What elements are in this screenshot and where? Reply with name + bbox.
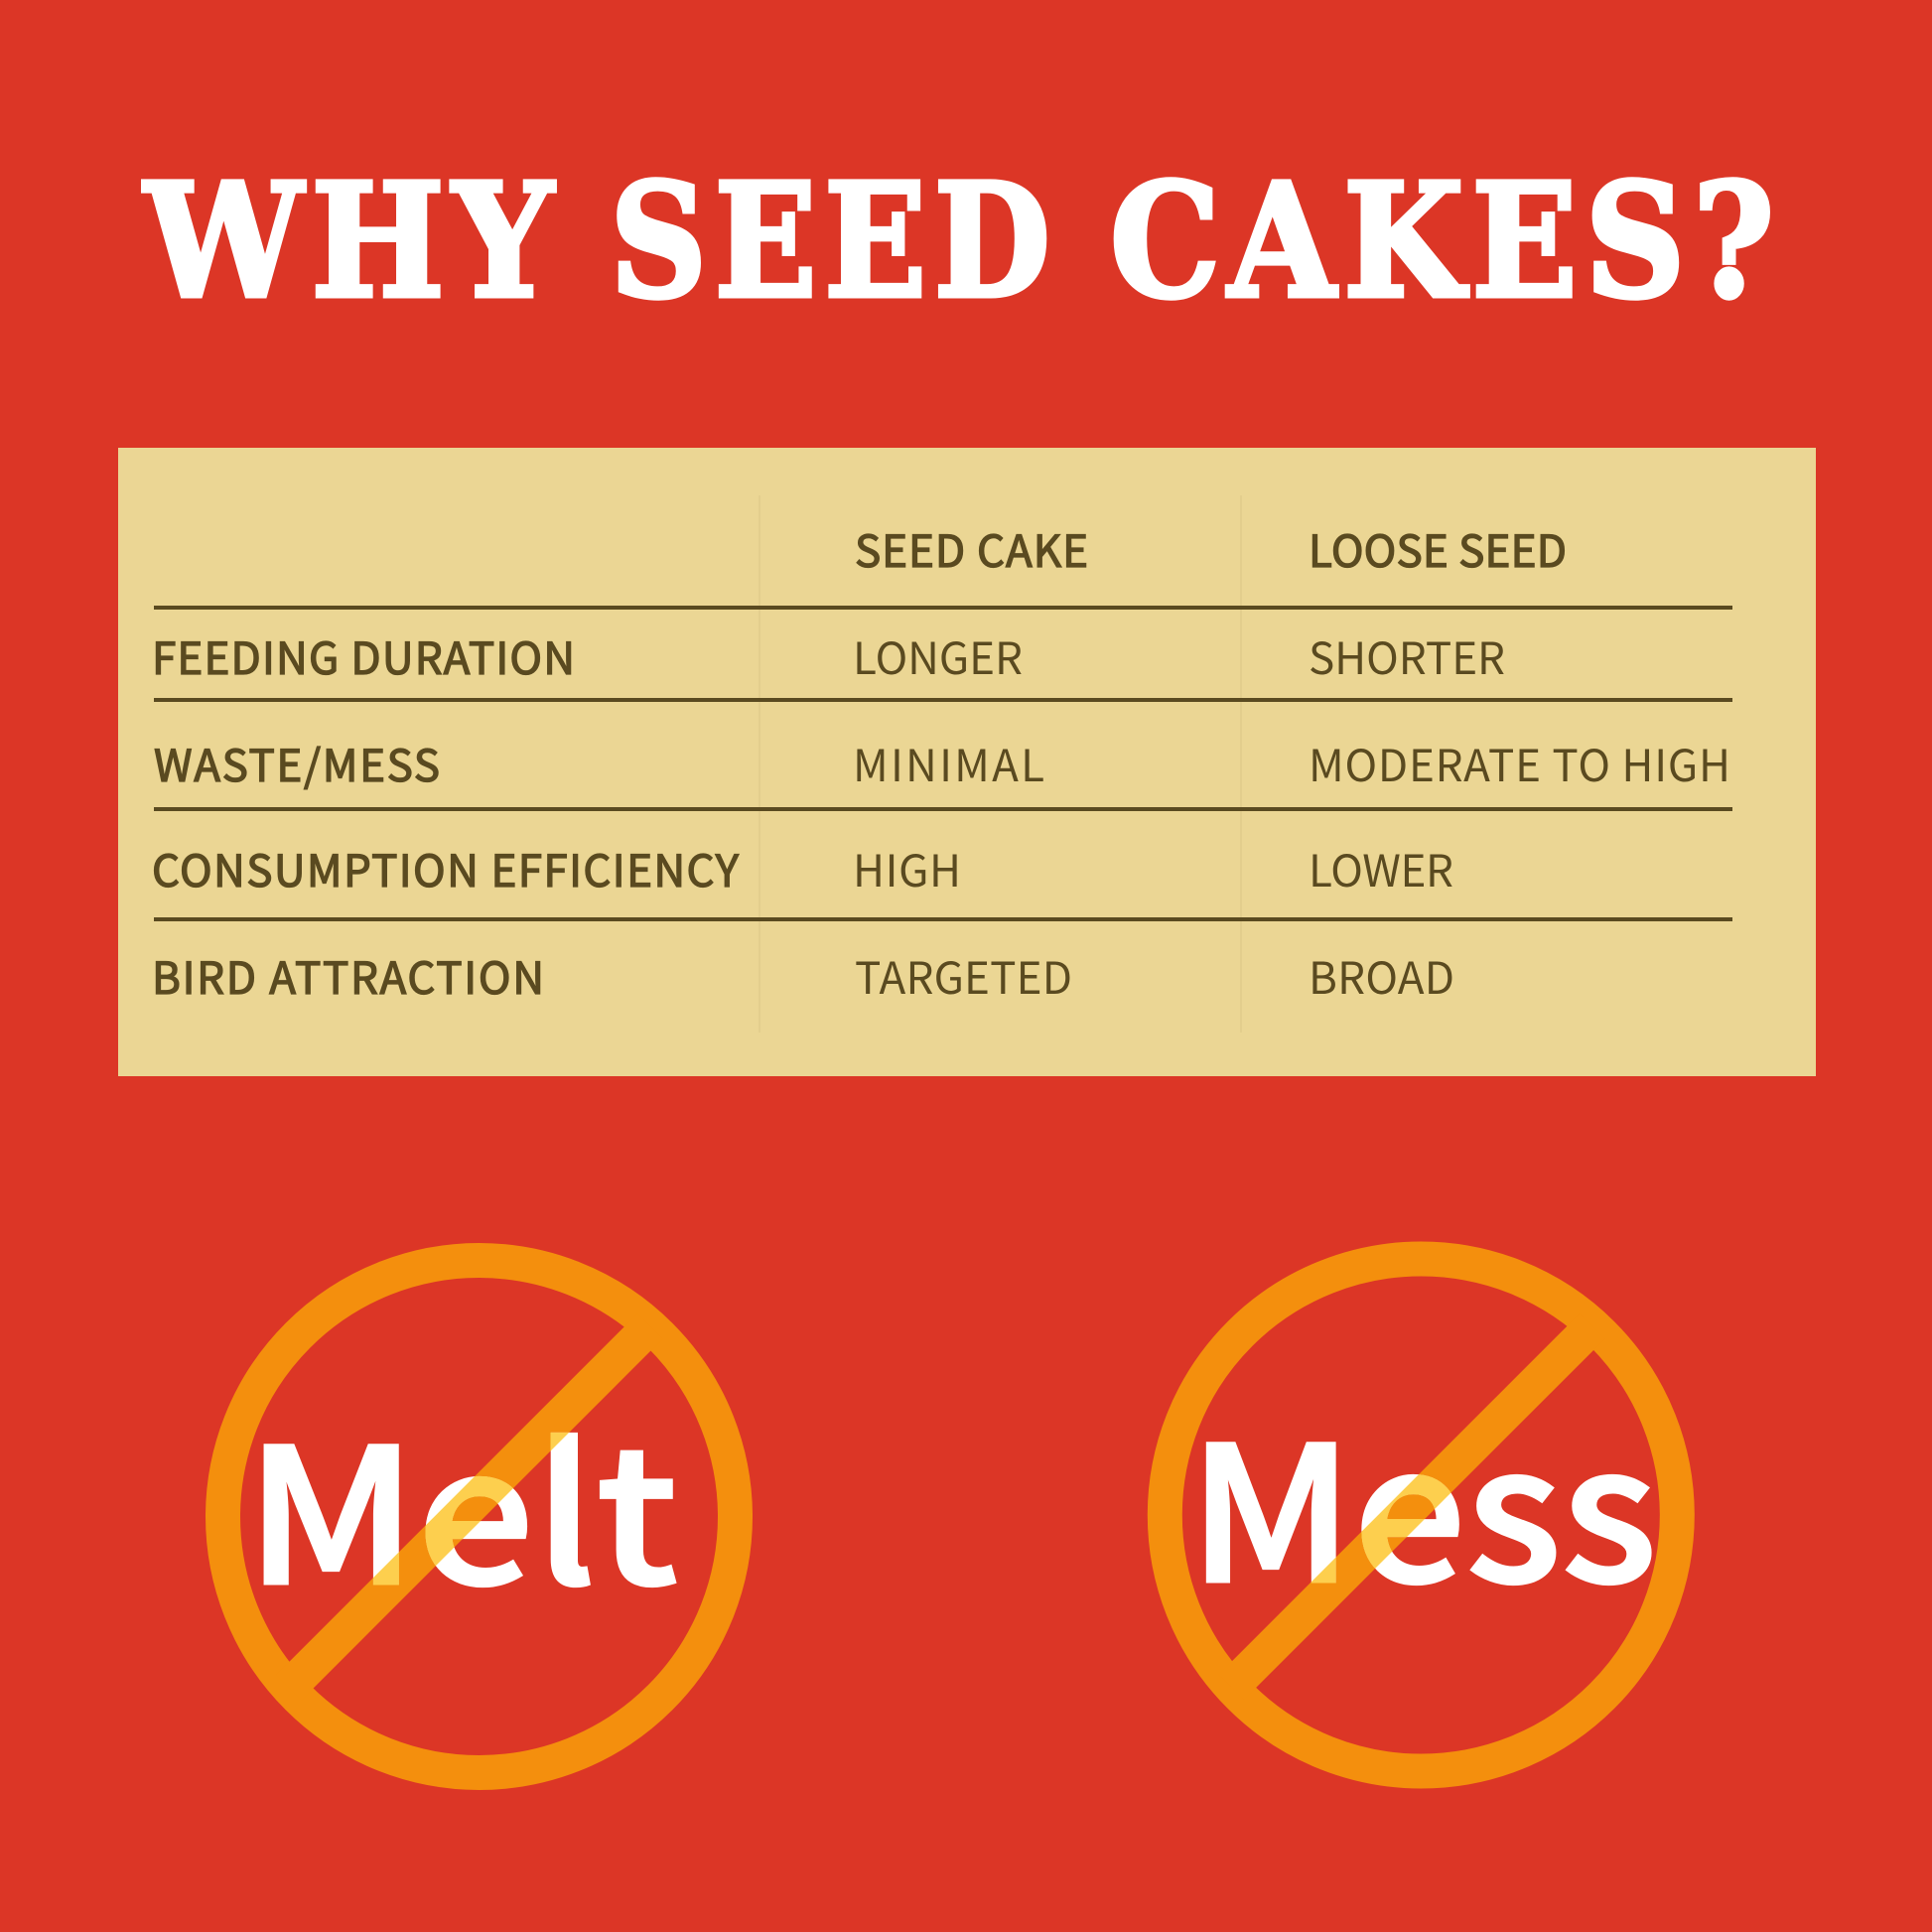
row: waste/mess: WASTE/MESS — [154, 731, 440, 794]
row: bird attraction — [152, 943, 1454, 1007]
label: melt: Melt — [245, 1367, 678, 1638]
title: SEED — [610, 150, 1058, 334]
row: feeding duration: LONGER — [853, 623, 1023, 687]
row: feeding duration: FEEDING DURATION — [152, 623, 575, 687]
row: bird attraction: BIRD ATTRACTION — [152, 943, 544, 1007]
icon: no mess sign — [1165, 1259, 1677, 1771]
panel: comparison table — [118, 448, 1816, 1076]
row: consumption efficiency — [152, 836, 1453, 899]
row: bird attraction: BROAD — [1309, 943, 1454, 1007]
title: CAKES? — [1110, 150, 1782, 334]
row: bird attraction: TARGETED — [855, 943, 1072, 1007]
row: waste/mess: MODERATE TO HIGH — [1309, 731, 1730, 794]
row: feeding duration — [152, 623, 1505, 687]
row: feeding duration: SHORTER — [1309, 623, 1505, 687]
row: waste/mess — [154, 731, 1730, 794]
icon: no melt sign — [222, 1261, 735, 1773]
column header: loose seed: LOOSE SEED — [1309, 516, 1567, 580]
row: waste/mess: MINIMAL — [853, 731, 1044, 794]
row: consumption efficiency: CONSUMPTION EFFICIENCY — [152, 836, 740, 899]
panel background — [118, 448, 1816, 1076]
row: consumption efficiency: HIGH — [853, 836, 961, 899]
title — [143, 150, 1782, 334]
column header: seed cake: SEED CAKE — [855, 516, 1088, 580]
title: WHY — [143, 150, 562, 334]
row: consumption efficiency: LOWER — [1309, 836, 1453, 899]
label: mess: Mess — [1188, 1365, 1657, 1636]
